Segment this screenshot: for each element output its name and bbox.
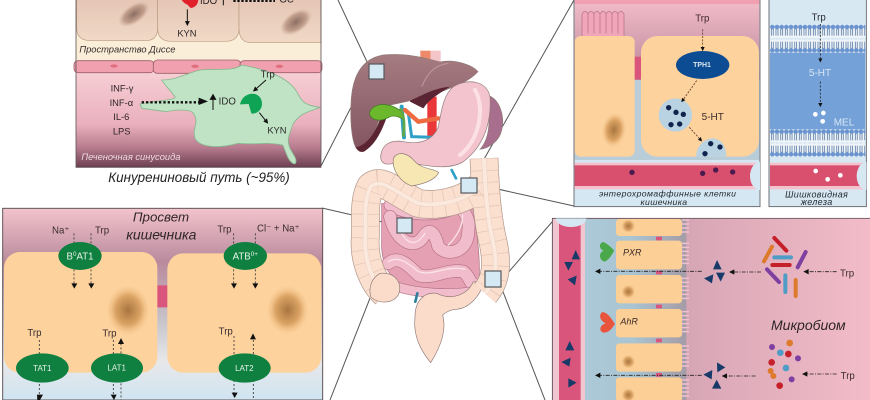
stomach	[381, 82, 490, 167]
dashed arrows	[598, 271, 837, 376]
vessel	[556, 210, 586, 400]
substrate labels: Trp	[217, 224, 231, 235]
gallbladder	[369, 105, 403, 120]
caption: кишечника	[641, 197, 687, 207]
membrane bottom	[770, 129, 865, 157]
transporter labels: ATB	[233, 251, 251, 262]
Trp and KYN text	[261, 70, 287, 135]
transporter labels: B	[67, 251, 73, 262]
cytokines	[110, 84, 134, 137]
nuclei	[107, 286, 308, 335]
receptor PXR	[600, 242, 614, 262]
Disse label: Пространство Диссе	[79, 44, 175, 54]
panel: microbiome: AhR	[619, 317, 638, 327]
junction	[634, 57, 642, 79]
blood vessels	[402, 51, 456, 302]
transporter labels: 0+	[251, 251, 258, 258]
epithelium	[616, 219, 682, 400]
connector lines	[321, 0, 574, 400]
lumen background	[3, 208, 323, 400]
Disse space background	[76, 0, 321, 62]
bile duct	[400, 108, 404, 137]
caption: kynurenine pathway: Кинурениновый путь (~95%)	[108, 170, 290, 185]
cytokines: INF-α	[110, 98, 134, 108]
substrate labels	[27, 224, 300, 340]
caption	[785, 189, 848, 207]
caption: железа	[800, 197, 833, 207]
substrate labels: Na⁺	[52, 226, 69, 237]
receptor AhR	[600, 312, 615, 333]
transporters	[16, 242, 271, 383]
arrowheads	[37, 283, 258, 400]
arrowhead	[199, 98, 208, 105]
background	[769, 0, 866, 207]
substrate labels: Trp	[219, 326, 233, 337]
liver	[351, 54, 478, 150]
Trp and KYN text: Trp	[261, 70, 275, 81]
cecum	[370, 273, 400, 302]
arrows	[682, 29, 703, 141]
nuclei	[115, 0, 316, 40]
Kupffer arrows	[254, 80, 267, 123]
transporter labels: TAT1	[33, 364, 52, 373]
background	[574, 0, 760, 207]
lumen label	[126, 209, 197, 242]
Trp and KYN text: KYN	[267, 125, 287, 135]
substrate labels: Trp	[102, 329, 116, 340]
transporter labels: LAT1	[107, 363, 126, 372]
Trp label: Trp	[695, 14, 709, 25]
panel: enterochromaffin cells	[574, 0, 770, 207]
transporter labels: 0	[73, 251, 77, 258]
bowel folds	[388, 205, 476, 293]
hepatocyte labels: KYN	[177, 29, 197, 39]
junctions	[656, 237, 662, 377]
vesicles	[659, 98, 726, 157]
nucleus	[599, 111, 629, 149]
endothelium	[74, 60, 322, 73]
transporter labels: AT1	[76, 251, 93, 262]
cytokines: IL-6	[113, 112, 129, 122]
lumen label: кишечника	[126, 226, 197, 242]
panel: microbiome	[552, 210, 870, 400]
IDO enzyme red	[182, 0, 198, 8]
frame	[76, 0, 321, 167]
liver shadow	[356, 87, 450, 152]
metabolite triangles	[561, 250, 725, 389]
cell left	[575, 36, 635, 157]
arrows	[819, 24, 822, 106]
Kupffer cell	[140, 65, 320, 164]
melatonin dots	[813, 111, 843, 182]
cytokines: LPS	[113, 127, 130, 137]
panel: pineal gland: 5-HT	[809, 68, 831, 79]
panel: enterochromaffin cells: TPH1	[693, 62, 711, 69]
TPH1 enzyme	[676, 51, 729, 79]
panel: pineal gland: MEL	[834, 117, 855, 128]
pancreas	[393, 154, 439, 186]
colon	[365, 158, 496, 293]
lumen	[575, 0, 759, 80]
serotonin dots	[666, 105, 723, 156]
spleen	[480, 95, 503, 149]
panel: kynurenine pathway	[74, 0, 322, 167]
enterocyte left	[4, 252, 157, 373]
sinusoid background	[76, 72, 321, 167]
location squares	[369, 64, 501, 287]
membrane top	[770, 25, 865, 53]
rod bacteria	[764, 238, 806, 296]
caption: Шишковидная	[785, 189, 848, 199]
hepatocyte arrows	[187, 0, 275, 25]
lumen label: Просвет	[133, 209, 189, 224]
rectum and sigmoid	[415, 282, 483, 363]
transporter labels	[33, 251, 258, 373]
dotted activation arrow	[142, 99, 200, 106]
tight junction	[157, 285, 169, 307]
microvilli	[582, 11, 624, 37]
stomach highlight	[460, 90, 480, 155]
hepatocyte labels	[177, 0, 294, 39]
microvilli	[682, 220, 689, 396]
small intestine base	[382, 200, 479, 296]
panel: pineal gland	[769, 0, 870, 207]
central organs	[351, 51, 503, 363]
hepatocytes	[77, 0, 321, 43]
IDO green pac enzyme	[240, 94, 262, 114]
receptor labels: PXR	[623, 247, 642, 257]
sinusoid label: Печеночная синусоида	[81, 152, 180, 162]
labels: Trp	[812, 12, 826, 23]
cytokines: INF-γ	[111, 84, 134, 94]
IDO label: IDO	[219, 97, 236, 108]
labels: Микробиом	[771, 317, 846, 333]
blood dots	[629, 167, 735, 176]
liver lobe line	[422, 63, 448, 87]
substrate labels: Trp	[27, 328, 41, 339]
caption: энтерохромаффинные клетки	[599, 189, 736, 199]
IDO up arrow	[210, 95, 216, 110]
cocci bacteria	[768, 340, 801, 389]
vessel	[575, 162, 770, 190]
enterochromaffin cell	[641, 36, 759, 157]
vessel	[770, 162, 870, 190]
panel: microbiome: Trp	[840, 269, 854, 280]
lumen	[552, 218, 870, 400]
arrowheads	[595, 269, 809, 379]
transporter labels: LAT2	[235, 364, 254, 373]
caption	[599, 189, 736, 207]
panel: intestinal lumen transporters	[3, 208, 323, 400]
blood side	[553, 219, 686, 400]
panel: microbiome: Trp	[841, 371, 855, 382]
digestive tract	[351, 51, 503, 363]
cell body	[770, 52, 865, 130]
nuclei	[621, 219, 635, 400]
dashed transport arrows	[39, 233, 255, 400]
5-HT label: 5-HT	[702, 112, 724, 123]
substrate labels: Trp	[95, 226, 109, 237]
substrate labels: Cl⁻ + Na⁺	[257, 224, 300, 235]
enterocyte right	[167, 253, 321, 373]
